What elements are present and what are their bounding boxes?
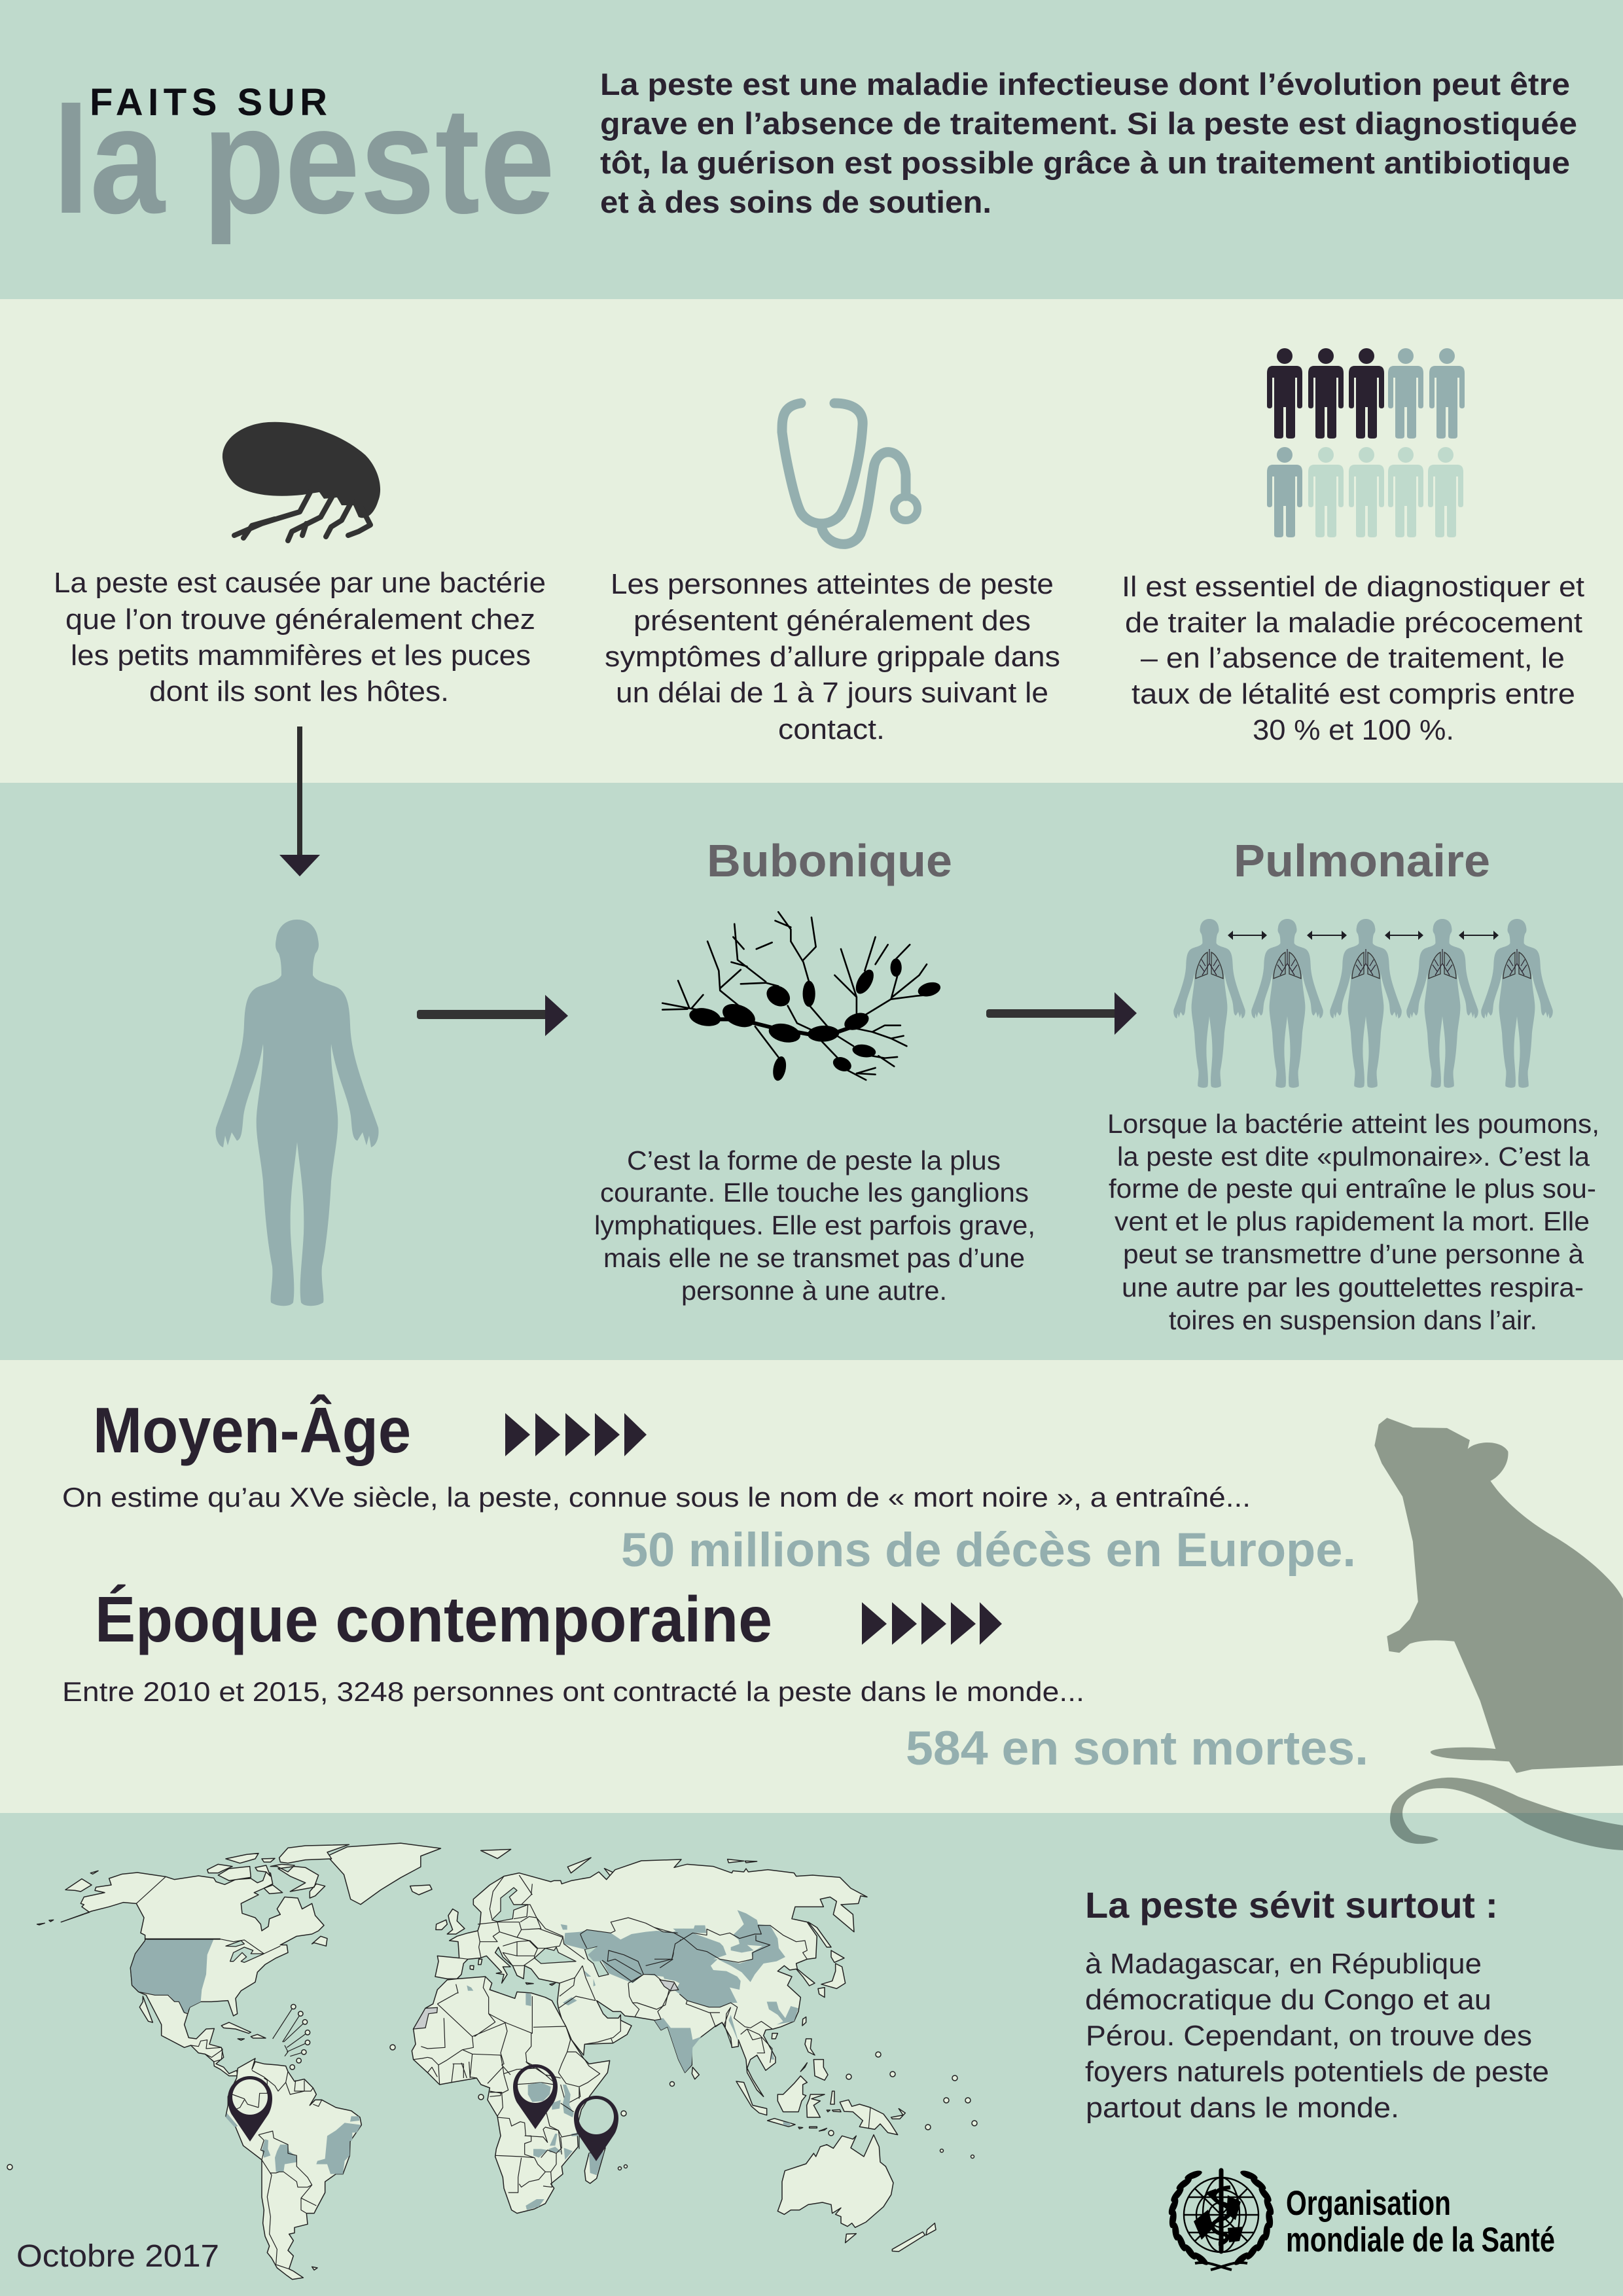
organisation name: Organisation (1286, 2184, 1451, 2223)
text: diagnosis: de traiter la maladie précocement (1125, 607, 1582, 639)
emblem (1167, 2169, 1275, 2270)
icon: chevrons medieval (505, 1413, 647, 1456)
arrow: to bubonic (417, 995, 568, 1036)
dark people row (1267, 348, 1384, 439)
text: pulmonary description: une autre par les gouttelettes respira- (1122, 1272, 1584, 1302)
intro text block: et à des soins de soutien. (600, 185, 991, 219)
icon: five people with lungs (1173, 919, 1553, 1088)
disputed Kashmir (660, 1980, 679, 1991)
text: symptoms: symptômes d’allure grippale dans (605, 641, 1060, 673)
text: where plague occurs: foyers naturels potentiels de peste (1085, 2056, 1549, 2088)
map: pacific and atlantic island markers (7, 2045, 977, 2170)
panel: history band (0, 1360, 1623, 1813)
text: bubonic description: C’est la forme de peste la plus (627, 1145, 1001, 1175)
stat: 50 millions: 50 millions de décès en Europe. (621, 1524, 1356, 1577)
text: pulmonary description: forme de peste qui entraîne le plus sou- (1109, 1174, 1596, 1204)
text: cause (54, 567, 546, 708)
map: Indonesia and Oceania (736, 2063, 936, 2251)
text: medieval statement: On estime qu’au XVe siècle, la peste, connue sous le nom de « mort noire », a entraîné... (62, 1482, 1251, 1513)
text: diagnosis: taux de létalité est compris entre (1132, 678, 1575, 710)
intro text block: tôt, la guérison est possible grâce à un traitement antibiotique (600, 145, 1570, 180)
text: cause: dont ils sont les hôtes. (149, 675, 449, 708)
text: pulmonary description: peut se transmettre d’une personne à (1123, 1239, 1584, 1269)
text: bubonic description: personne à une autre. (681, 1276, 947, 1306)
icon: rat (1374, 1418, 1623, 1850)
logo: WHO (1167, 2169, 1555, 2270)
panel: key facts band (0, 299, 1623, 783)
map: East and South Asia (654, 1859, 846, 2080)
panel: map band (0, 1813, 1623, 2296)
text: bubonic description (594, 1145, 1035, 1306)
text: modern statement: Entre 2010 et 2015, 3248 personnes ont contracté la peste dans le monde... (62, 1676, 1084, 1707)
double arrows between people (1228, 931, 1499, 940)
arrow: to pulmonary (986, 992, 1137, 1035)
heading: where plague occurs: La peste sévit surtout : (1085, 1884, 1498, 1926)
mid tone people (1267, 348, 1465, 537)
plague areas: north Africa and Levant (467, 1924, 577, 2006)
map: Africa (412, 1924, 610, 2214)
text: symptoms: un délai de 1 à 7 jours suivant le (616, 677, 1048, 709)
map: Greenland and arctic islands (327, 1843, 628, 1905)
organisation name (1286, 2184, 1555, 2259)
plague area: western USA (130, 1939, 214, 2014)
heading: epoque contemporaine: Époque contemporaine (95, 1583, 772, 1655)
text: bubonic description: mais elle ne se transmet pas d’une (603, 1243, 1025, 1273)
heading: bubonique: Bubonique (707, 835, 952, 886)
text: pulmonary description: la peste est dite «pulmonaire». C’est la (1117, 1141, 1590, 1172)
map pin: DR Congo (513, 2064, 558, 2129)
text: pulmonary description: toires en suspension dans l’air. (1169, 1305, 1537, 1335)
inland seas (492, 1888, 609, 1977)
intro text block: grave en l’absence de traitement. Si la peste est diagnostiquée (600, 106, 1577, 141)
title: la peste: la peste (52, 76, 555, 245)
plague areas: South America (226, 2113, 361, 2174)
island callout circles (290, 2004, 310, 2070)
arrow: down (279, 726, 320, 876)
plague area: central Asia (564, 1929, 689, 1983)
stat: 584 deaths: 584 en sont mortes. (906, 1722, 1368, 1775)
map: Australia (777, 2135, 893, 2227)
icon: chevrons modern (862, 1602, 1002, 1645)
map pin: Peru (228, 2076, 272, 2142)
text: bubonic description: courante. Elle touche les ganglions (600, 1177, 1029, 1208)
icon: stethoscope (782, 403, 918, 544)
text: pulmonary description: Lorsque la bactérie atteint les poumons, (1107, 1109, 1599, 1139)
island callout lines (273, 2007, 308, 2056)
Western Sahara (414, 2007, 437, 2029)
text: cause: que l’on trouve généralement chez (65, 603, 535, 636)
text: where plague occurs: démocratique du Congo et au (1085, 1984, 1491, 2016)
icon: human body (215, 920, 379, 1306)
map: South America (226, 2058, 361, 2280)
text: diagnosis (1122, 571, 1584, 746)
text: symptoms: contact. (778, 713, 885, 745)
intro text block: La peste est une maladie infectieuse dont l’évolution peut être (600, 67, 1570, 101)
text: bubonic description: lymphatiques. Elle est parfois grave, (594, 1210, 1035, 1240)
map: Eurasia land (410, 1859, 867, 2096)
text: cause: La peste est causée par une bactérie (54, 567, 546, 599)
map: Madagascar (584, 2148, 605, 2183)
text: diagnosis: – en l’absence de traitement, le (1141, 642, 1565, 674)
text: cause: les petits mammifères et les puces (71, 639, 531, 672)
icon: lymph nodes (662, 912, 944, 1081)
text: symptoms: présentent généralement des (633, 605, 1031, 637)
world map (7, 1843, 977, 2280)
text: symptoms: Les personnes atteintes de peste (611, 568, 1054, 600)
light people (1308, 447, 1463, 537)
icon: people ratio (1267, 348, 1465, 537)
laurel leaves left (1167, 2169, 1210, 2267)
text: diagnosis: Il est essentiel de diagnostiquer et (1122, 571, 1584, 603)
panel: forms of plague band (0, 783, 1623, 1360)
text: where plague occurs (1085, 1948, 1549, 2124)
title (52, 76, 555, 245)
date: Octobre 2017 (16, 2239, 219, 2274)
text: where plague occurs: partout dans le monde. (1086, 2092, 1399, 2124)
text: pulmonary description: vent et le plus rapidement la mort. Elle (1115, 1206, 1590, 1236)
text: diagnosis: 30 % et 100 %. (1253, 714, 1454, 746)
map pin: Madagascar (574, 2096, 618, 2161)
text: pulmonary description (1107, 1109, 1599, 1335)
map: southern Africa details (490, 2083, 604, 2210)
heading: pulmonaire: Pulmonaire (1234, 835, 1490, 886)
panel: header band (0, 0, 1623, 299)
plague area: China and Mongolia (660, 1910, 785, 2007)
icon: flea (223, 422, 380, 541)
map: Asia shading and borders (459, 1875, 689, 2044)
organisation name: mondiale de la Santé (1286, 2221, 1555, 2259)
laurel leaves right (1232, 2169, 1275, 2267)
title: faits sur: FAITS SUR (90, 81, 327, 124)
heading: moyen-age: Moyen-Âge (93, 1394, 411, 1466)
text: where plague occurs: à Madagascar, en République (1085, 1948, 1482, 1980)
text: where plague occurs: Pérou. Cependant, on trouve des (1086, 2020, 1532, 2052)
map: North and Central America (37, 1844, 349, 2076)
intro text block (600, 67, 1577, 219)
text: symptoms (605, 568, 1060, 745)
